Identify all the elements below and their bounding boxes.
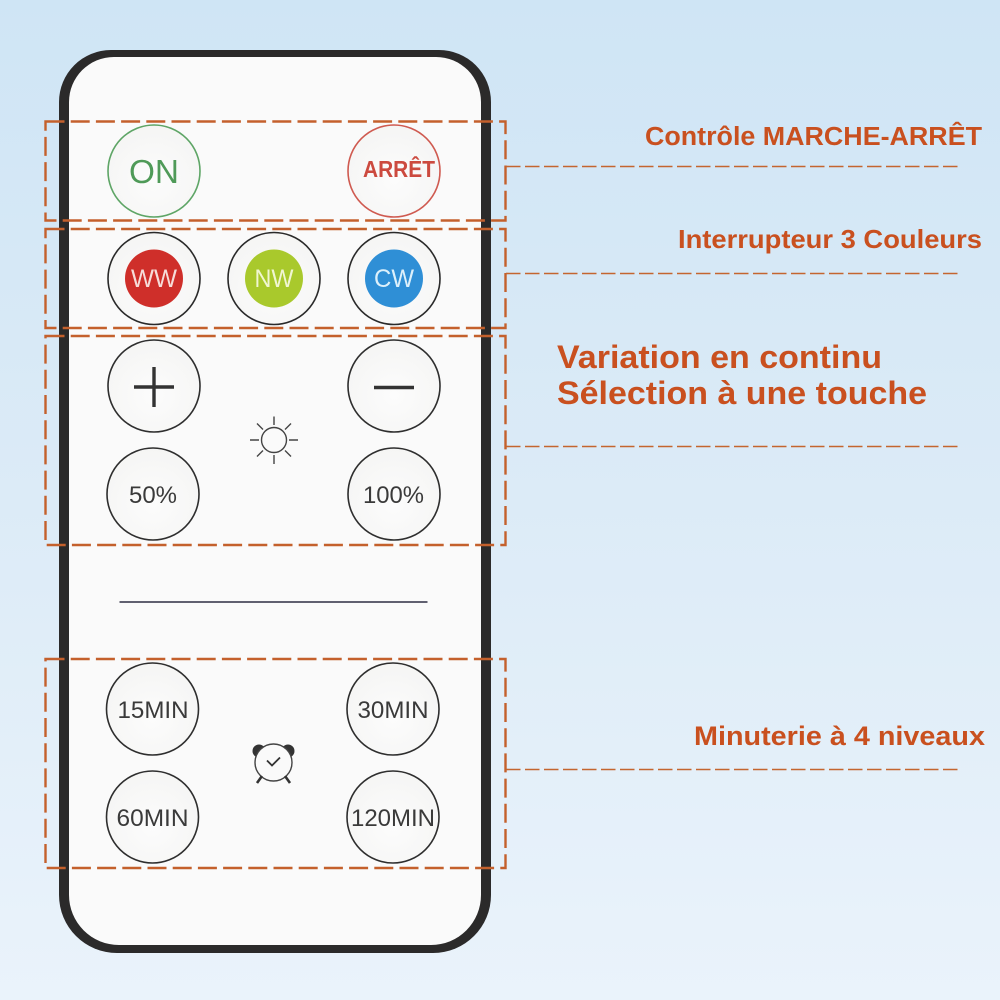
button: 50%: 50% [129, 482, 177, 509]
button: ON [108, 125, 200, 217]
callout box: dimming group [46, 336, 506, 545]
leader line: on-off [506, 166, 958, 168]
leader line: dimming [506, 446, 958, 448]
leader line: colour [506, 272, 958, 274]
button: plus [108, 340, 200, 432]
button: ARRET: ARRÊT [363, 155, 435, 182]
icon: sun [250, 416, 298, 464]
button: 60MIN [106, 771, 198, 863]
icon: alarm clock [252, 744, 294, 783]
button: 60MIN: 60MIN [116, 805, 188, 832]
button: WW warm white [108, 232, 200, 324]
button: 100% [348, 448, 440, 540]
button: CW cool white: CW [374, 265, 414, 293]
label: three colour switch: Interrupteur 3 Couleurs [678, 224, 982, 254]
label: timer levels: Minuterie à 4 niveaux [694, 721, 985, 751]
label: on-off control: Contrôle MARCHE-ARRÊT [645, 121, 982, 151]
button: 50% [107, 448, 199, 540]
button: ARRET [348, 125, 440, 217]
button: 30MIN: 30MIN [358, 697, 428, 724]
label: dimming description: Sélection à une touche [557, 375, 927, 411]
label: dimming description [557, 339, 927, 411]
button: 120MIN [347, 771, 439, 863]
button: 15MIN [106, 663, 198, 755]
button: NW neutral white: NW [254, 265, 294, 293]
callout box: colour group [46, 229, 506, 328]
button: minus [348, 340, 440, 432]
callout box: timer group [46, 659, 506, 868]
button: 15MIN: 15MIN [118, 697, 188, 724]
leader line: timer [506, 768, 958, 770]
button: 100%: 100% [363, 482, 424, 509]
remote control body [59, 50, 491, 953]
button: NW neutral white [228, 232, 320, 324]
button: 30MIN [347, 663, 439, 755]
label: dimming description: Variation en continu [557, 339, 882, 375]
button: WW warm white: WW [131, 265, 177, 293]
button: ON: ON [129, 153, 179, 190]
callout box: on-off group [46, 122, 506, 220]
button: 120MIN: 120MIN [351, 805, 435, 832]
button: CW cool white [348, 232, 440, 324]
divider line [120, 601, 428, 603]
